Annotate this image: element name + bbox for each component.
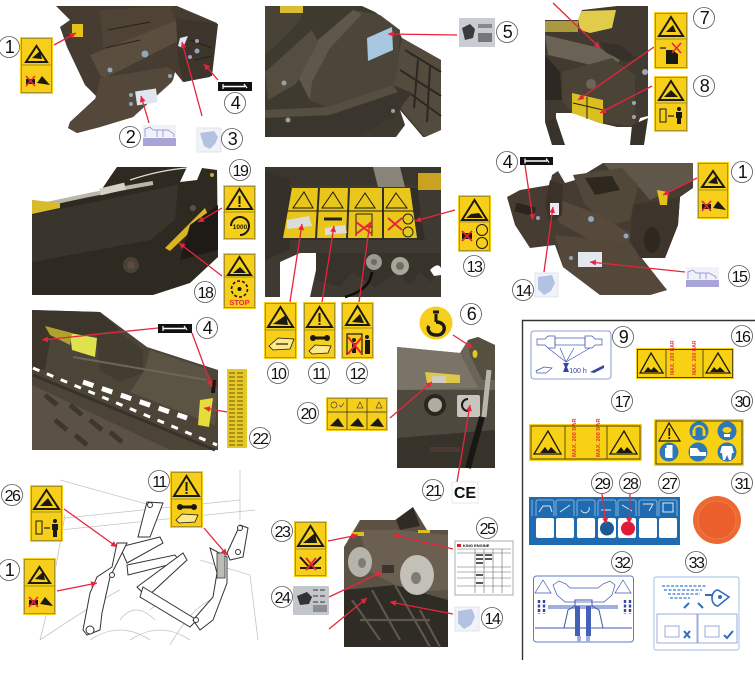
callouts: catalogue: 33 [689,555,705,572]
callouts: top left: 1 [5,37,15,57]
decal 18 [223,253,256,309]
photo: hitch beam with hoses [32,167,218,295]
callouts: line drawing: 26 [5,488,21,505]
callout 5: 5 [503,22,513,42]
callouts: right side plate: 14 [516,283,532,300]
arrows: hitch beam [179,208,222,276]
callouts: gearbox rear: 23 [275,524,291,541]
decal 33 [654,577,739,650]
callouts 19 and 18: 18 [198,285,214,302]
photo: decal strip on frame [265,167,441,297]
decal 32 [534,576,634,642]
callouts: catalogue: 30 [735,394,751,411]
decal strip: blue with buttons [529,497,680,545]
photo: front side plate of machine [56,6,218,133]
callouts 19 and 18: 19 [233,163,249,180]
decal 14 (bottom) [455,607,479,631]
decal 13 [458,195,491,252]
callouts 4 and 22: 22 [253,431,269,448]
decal 1 (right) [697,162,729,219]
callouts: top left: 4 [231,93,241,113]
decal 4: black strip [218,82,252,91]
callouts: gearbox rear [272,518,502,628]
reflector 31 [693,496,741,544]
callouts: top left: 2 [126,127,136,147]
callouts 7 and 8: 8 [700,76,710,96]
callouts 10 to 13: 13 [467,259,483,276]
decal 21: CE mark: CE [454,485,476,502]
decal 9: 100 h [569,368,587,375]
decal 4 (right) [520,157,553,165]
arrows: side view [42,328,227,412]
decal 23 [294,521,327,577]
decal 4 (middle) [158,324,192,333]
callouts: catalogue: 16 [735,329,751,346]
callouts 4 and 22 [196,318,270,448]
decal 15 [686,267,719,287]
decal 1 [20,37,53,94]
decal 17: MAX. 200 BAR [572,418,578,457]
arrows: right side plate [525,165,697,272]
decal 22 [227,369,247,448]
decal 17: MAX. 200 BAR [596,418,602,457]
photo: plate with decal 20 and CE mark [397,337,495,468]
callouts 10 to 13: 12 [350,366,366,383]
decal 24 [293,586,329,615]
decal 2 [143,125,176,146]
decal 25: KING ENGINE [463,543,490,548]
callouts: right side plate: 1 [738,162,748,182]
callouts 19 and 18 [194,160,250,302]
decal 5 [459,18,495,47]
decal 14 (right) [535,273,558,297]
photo: right side plate of machine [507,163,693,295]
callout 5 [496,22,518,42]
arrows: gearbox rear [328,535,453,629]
callouts: catalogue: 32 [615,555,631,572]
callouts: right side plate: 15 [732,269,748,286]
callouts 20 and 21 [298,402,444,500]
photo: rotary tiller side view [32,310,218,450]
arrows: photo 1 [54,33,218,123]
decal 10 [264,302,297,359]
callouts: right side plate: 4 [503,152,513,172]
callouts: catalogue [592,326,752,572]
callouts 7 and 8: 7 [700,8,710,28]
decal 30 [654,419,744,466]
decal 16: MAX. 200 BAR [692,340,698,375]
callouts: line drawing: 1 [5,560,15,580]
decal 11 (line drawing) [170,471,203,528]
callouts: catalogue: 17 [615,394,631,411]
callouts 7 and 8 [694,8,714,96]
decal 3 [197,128,221,152]
decal 17 [529,418,642,461]
callouts 20 and 21: 21 [426,483,442,500]
arrows: plate [390,335,473,482]
callouts: gearbox rear: 24 [275,590,291,607]
photo: rotor cover with decal 5 [265,6,441,137]
arrows: decal strip [290,210,455,302]
callout 6: 6 [467,304,477,324]
decal 18: STOP [229,298,250,307]
callouts: catalogue: 29 [595,476,611,493]
decal 19: 1000 [233,224,248,231]
arrows: rear gearbox [553,3,654,113]
line drawing: three point hitch [40,470,258,645]
hook decal 6 [420,306,452,340]
decal 1 (line drawing) [23,558,56,615]
callouts 10 to 13: 11 [312,366,327,383]
decal 20 [326,397,388,431]
panel: decal catalogue frame [522,320,755,660]
decal 16: MAX. 200 BAR [670,340,676,375]
callouts 10 to 13: 10 [271,366,287,383]
decal 9 [531,331,611,379]
callouts: catalogue: 27 [662,476,678,493]
callouts: line drawing: 11 [152,474,167,491]
callouts 10 to 13 [268,256,484,384]
callouts: gearbox rear: 14 [485,611,501,628]
arrows: line drawing [57,509,227,591]
callouts: catalogue: 28 [623,476,639,493]
decal 25 [455,541,513,595]
callouts 4 and 22: 4 [203,318,213,338]
decal 12 [341,302,374,359]
photo: rear gearbox [545,6,648,145]
decal 21: CE mark [452,482,478,503]
decal 7 [654,12,688,69]
callouts: catalogue: 9 [619,327,629,347]
decal 26 [30,485,63,542]
decal 8 [654,76,688,132]
callouts: gearbox rear: 25 [480,521,496,538]
decal 11 (top row) [303,302,336,359]
photo: gearbox rear with discs [344,507,448,647]
callout 6 [460,304,482,324]
callouts: line drawing [0,470,170,580]
callouts: right side plate [496,152,752,300]
callouts: top left [0,36,246,150]
callouts: top left: 3 [228,129,238,149]
arrow to decal 5 [388,34,457,35]
decal 19 [223,185,256,240]
arrows: 28 and 29 [602,494,630,524]
callouts: catalogue: 31 [735,476,751,493]
callouts 20 and 21: 20 [301,406,317,423]
decal 16 [636,340,734,379]
